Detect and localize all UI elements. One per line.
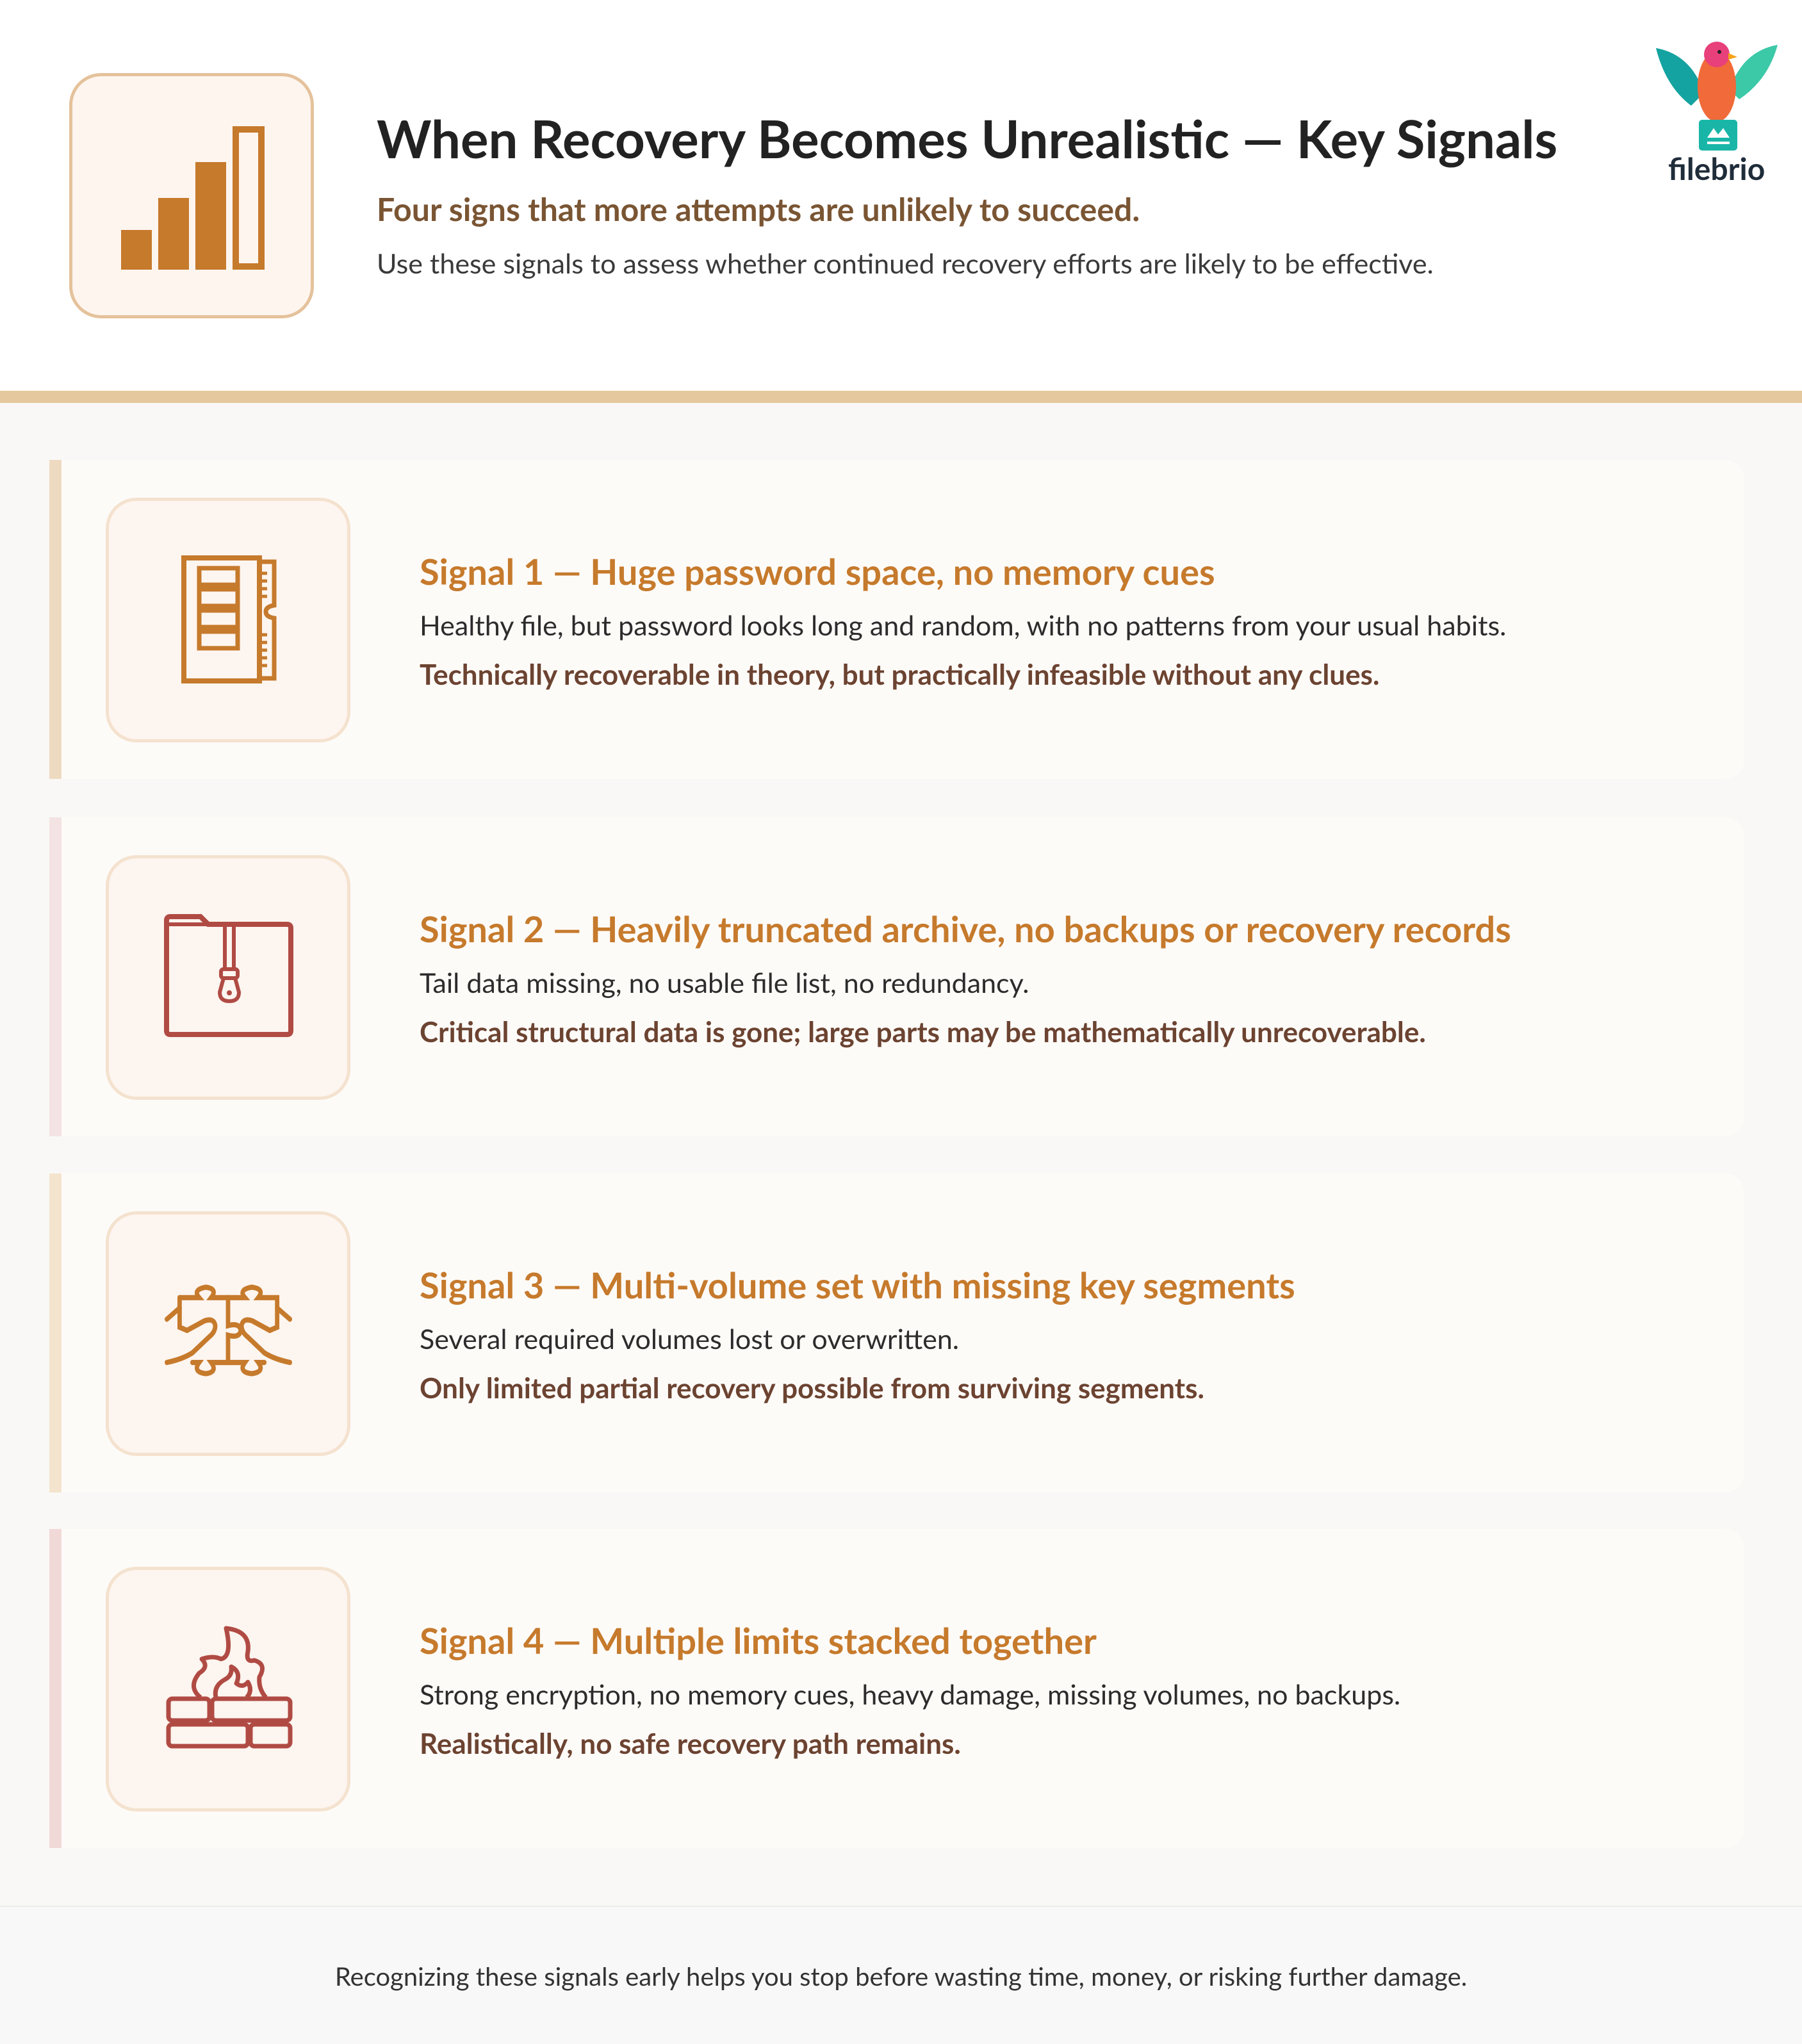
verdict: Critical structural data is gone; large parts may be mathematically unrecoverable. [420,1015,1426,1049]
text: Several required volumes lost or overwritten. [420,1323,959,1355]
heading: Signal 4 — Multiple limits stacked together [420,1619,1097,1662]
icon: firewall [106,1567,350,1811]
verdict: Technically recoverable in theory, but practically infeasible without any clues. [420,658,1379,691]
icon: zip folder [106,855,350,1100]
title: When Recovery Becomes Unrealistic — Key Signals [377,108,1557,170]
logo: filebrio: filebrio [1668,151,1765,187]
divider band [0,391,1802,403]
heading: Signal 2 — Heavily truncated archive, no backups or recovery records [420,907,1511,950]
panel: signal 2 [49,817,1744,1136]
description: Use these signals to assess whether continued recovery efforts are likely to be effective. [377,247,1434,280]
text: Strong encryption, no memory cues, heavy damage, missing volumes, no backups. [420,1678,1400,1711]
footer text: Recognizing these signals early helps you stop before wasting time, money, or risking further damage. [335,1961,1467,1991]
logo: filebrio [1656,42,1778,187]
verdict: Only limited partial recovery possible from surviving segments. [420,1371,1204,1405]
icon: ram module [106,498,350,742]
panel: signal 3 [49,1173,1744,1492]
heading: Signal 3 — Multi-volume set with missing key segments [420,1263,1295,1306]
panel: signal 4 [49,1529,1744,1848]
body background [0,403,1802,1906]
subtitle: Four signs that more attempts are unlikely to succeed. [377,190,1140,228]
text: Tail data missing, no usable file list, no redundancy. [420,967,1029,999]
heading: Signal 1 — Huge password space, no memory cues [420,550,1215,593]
footer [0,1906,1802,2044]
text: Healthy file, but password looks long and random, with no patterns from your usual habits. [420,609,1506,642]
header icon box [69,73,314,318]
icon: puzzle hands [106,1211,350,1456]
verdict: Realistically, no safe recovery path remains. [420,1727,961,1760]
panel: signal 1 [49,460,1744,779]
